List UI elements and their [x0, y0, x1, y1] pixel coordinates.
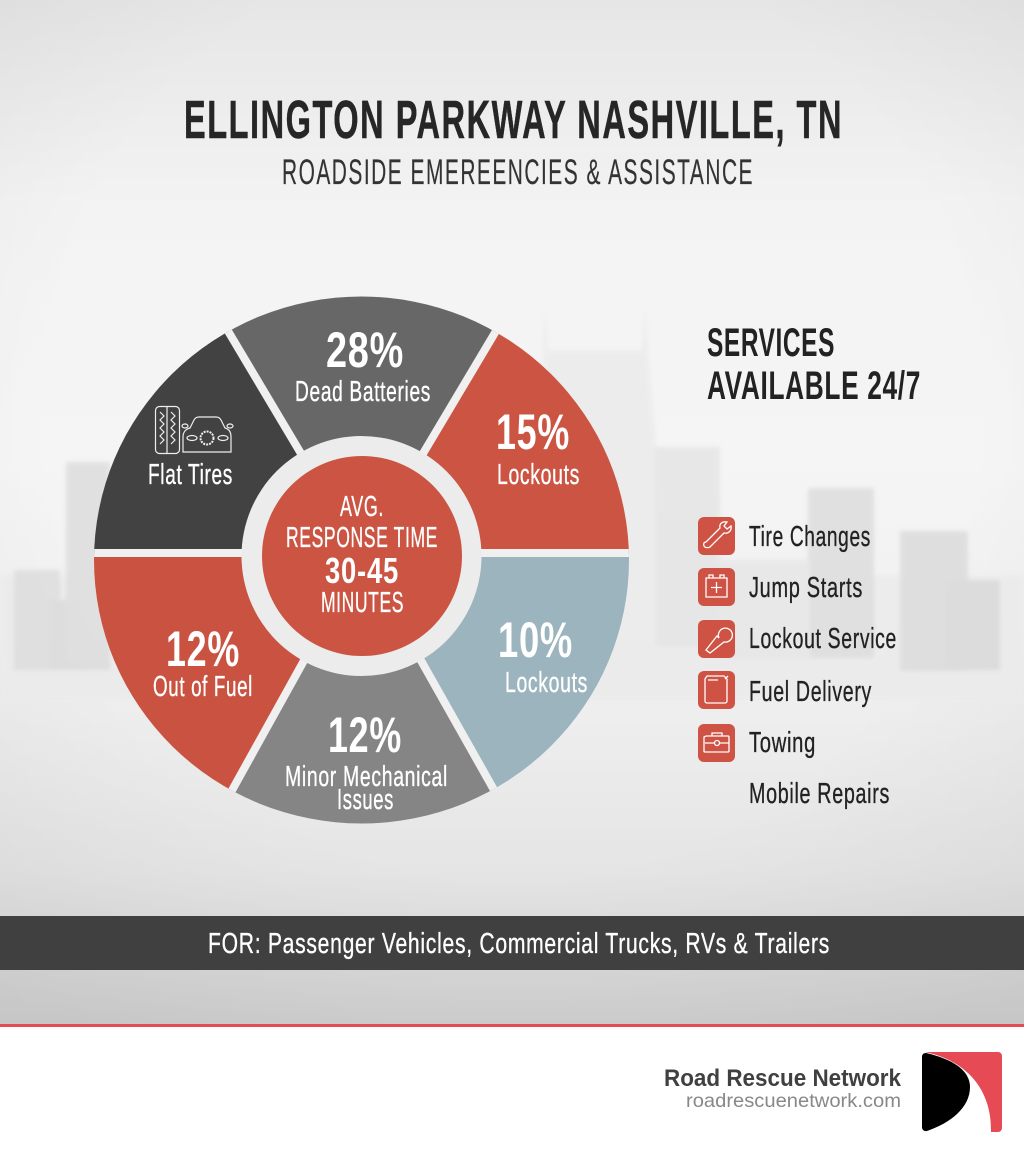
service: towing [698, 724, 816, 762]
segment: dead batteries [228, 296, 496, 452]
heading: services available [707, 321, 921, 408]
heading: services available: SERVICES [707, 321, 835, 365]
service: fuel delivery: Fuel Delivery [749, 676, 872, 708]
heading: services available: AVAILABLE 24/7 [707, 364, 921, 408]
hub: average response time: RESPONSE TIME [286, 522, 438, 554]
label: 12% minor mechanical issues: Minor Mechanical [285, 761, 448, 793]
hub ring [242, 436, 482, 676]
segment: lockouts 10% [424, 554, 629, 789]
hub: average response time: AVG. [340, 491, 384, 523]
logo [922, 1052, 1002, 1132]
label: 10% lockouts: 10% [498, 612, 573, 668]
hub: average response time [262, 456, 462, 656]
icon: tire and car [156, 406, 233, 454]
label: 15% lockouts [496, 404, 580, 491]
donut chart: roadside emergencies [60, 285, 660, 830]
service: jump starts [698, 568, 863, 606]
segment: minor mechanical [232, 662, 494, 824]
label: 12% minor mechanical issues: 12% [328, 707, 402, 763]
hub: average response time: MINUTES [321, 587, 404, 619]
service: jump starts: Jump Starts [749, 572, 863, 604]
service: lockout service: Lockout Service [749, 623, 897, 655]
brand name: Road Rescue Network [664, 1065, 902, 1092]
service: mobile repairs: Mobile Repairs [749, 778, 890, 810]
label: 28% dead batteries: 28% [326, 322, 404, 378]
label: 15% lockouts: 15% [496, 404, 570, 460]
service: fuel delivery [698, 671, 872, 709]
service: towing: Towing [749, 727, 816, 759]
skyline silhouette [0, 305, 1024, 700]
label: flat tires: Flat Tires [148, 459, 233, 491]
label: 12% minor mechanical issues: Issues [337, 784, 394, 816]
label: 12% out of fuel: 12% [166, 621, 240, 677]
label: 10% lockouts: Lockouts [505, 667, 588, 699]
footer [0, 1024, 1024, 1154]
label: 12% out of fuel: Out of Fuel [153, 671, 253, 703]
segment: lockouts 15% [426, 332, 629, 554]
service: tire changes: Tire Changes [749, 521, 871, 553]
brand url: roadrescuenetwork.com [686, 1090, 901, 1112]
label: 10% lockouts [498, 612, 588, 699]
banner: vehicle types [0, 916, 1024, 970]
hub: average response time: 30-45 [325, 550, 399, 591]
service: tire changes [698, 517, 871, 555]
label: 12% out of fuel [153, 621, 253, 703]
segment: out of fuel [94, 554, 300, 790]
segment dividers [94, 330, 629, 792]
segment: flat tires [94, 332, 297, 554]
label: 28% dead batteries [295, 322, 431, 408]
label: 12% minor mechanical issues [285, 707, 448, 816]
label: 15% lockouts: Lockouts [497, 459, 580, 491]
services list [698, 517, 897, 810]
service: lockout service [698, 620, 897, 658]
label: 28% dead batteries: Dead Batteries [295, 376, 431, 408]
